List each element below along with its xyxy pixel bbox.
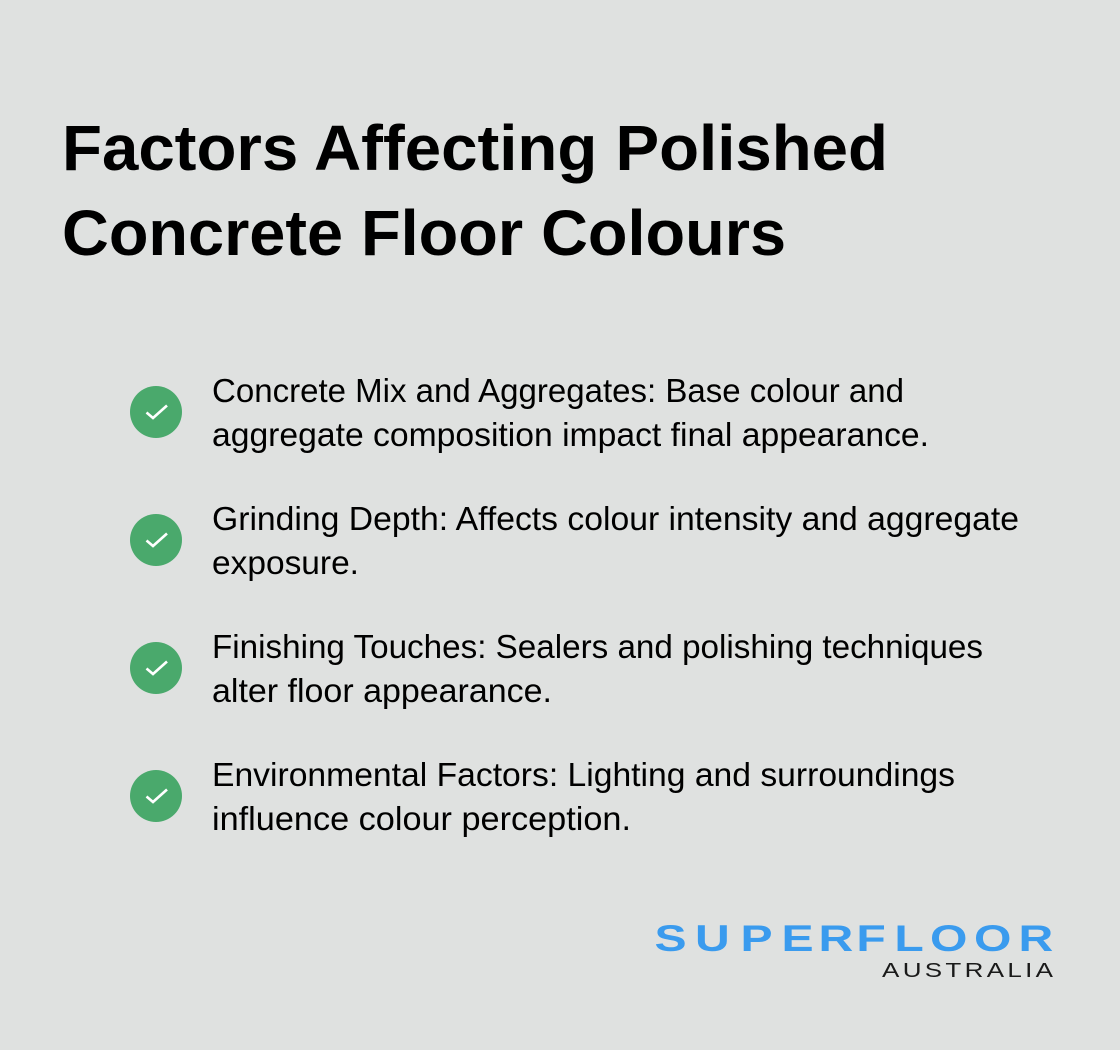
item 1 <box>130 372 929 453</box>
text: item 4 <box>212 756 955 837</box>
checklist <box>130 372 1019 837</box>
text: item 4: influence colour perception. <box>212 800 631 837</box>
logo <box>655 918 1054 981</box>
item 2 <box>130 500 1019 581</box>
item 4 <box>130 756 955 837</box>
icon: check 2 <box>130 514 182 566</box>
logo: SUPERFLOOR <box>655 918 1053 960</box>
text: item 2: Grinding Depth: Affects colour intensity and aggregate <box>212 500 1019 537</box>
text: item 2 <box>212 500 1019 581</box>
title <box>62 112 888 269</box>
text: item 1: Concrete Mix and Aggregates: Base colour and <box>212 372 904 409</box>
icon: check 4 <box>130 770 182 822</box>
title: Factors Affecting Polished <box>62 112 888 184</box>
item 3 <box>130 628 983 709</box>
text: item 2: exposure. <box>212 544 359 581</box>
text: item 3: alter floor appearance. <box>212 672 552 709</box>
text: item 1 <box>212 372 929 453</box>
icon: check 3 <box>130 642 182 694</box>
text: item 1: aggregate composition impact final appearance. <box>212 416 929 453</box>
icon: check 1 <box>130 386 182 438</box>
title: Concrete Floor Colours <box>62 197 786 269</box>
logo: AUSTRALIA <box>882 959 1054 981</box>
text: item 3: Finishing Touches: Sealers and polishing techniques <box>212 628 983 665</box>
text: item 4: Environmental Factors: Lighting and surroundings <box>212 756 955 793</box>
text: item 3 <box>212 628 983 709</box>
